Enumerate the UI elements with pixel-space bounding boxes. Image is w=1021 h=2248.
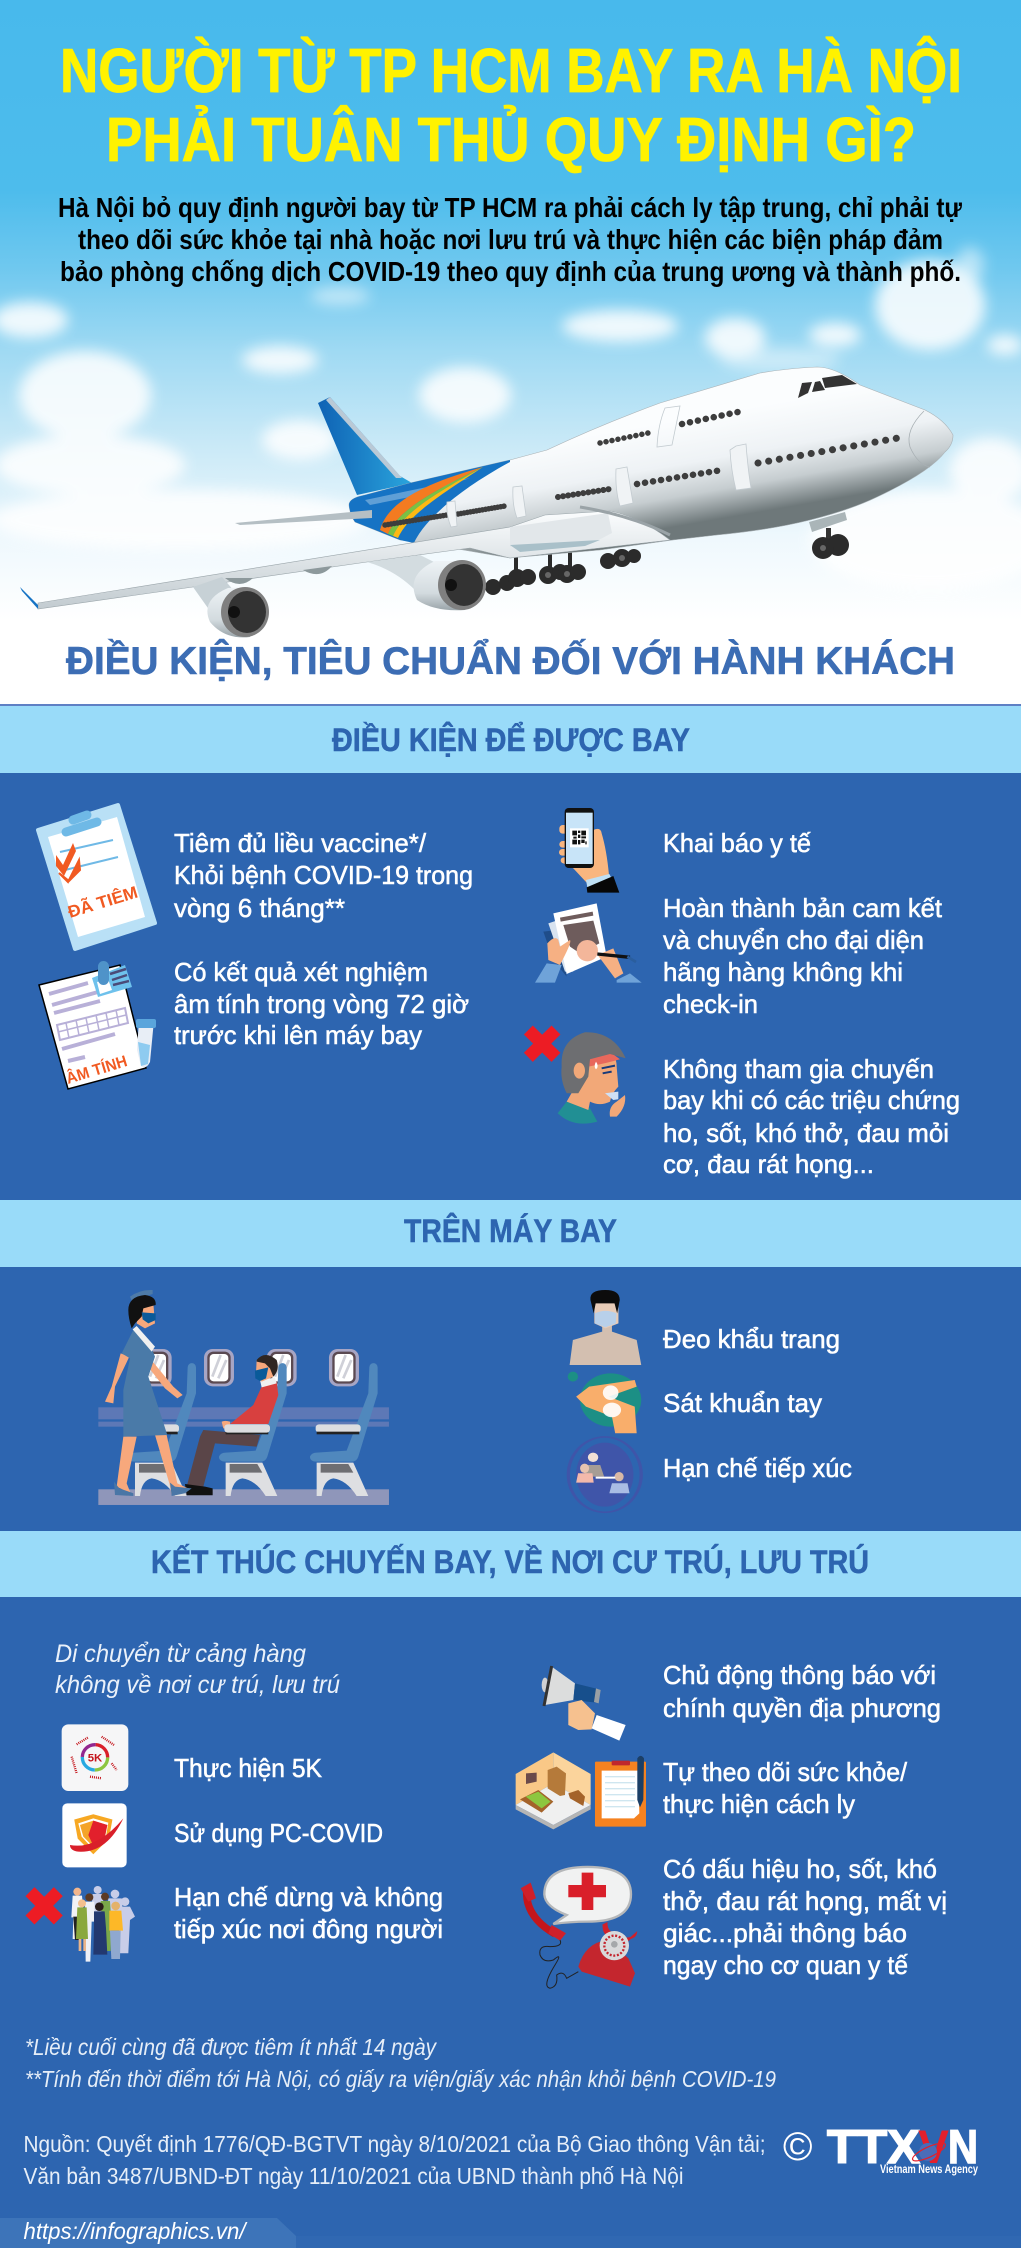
logo: TTXVN: TTX: [827, 2120, 920, 2173]
text: self monitoring: [663, 1757, 908, 1819]
icon: crowd with red cross: [30, 1886, 135, 1962]
text: hand sanitizing: Sát khuẩn tay: [663, 1388, 822, 1418]
source: Văn bản 3487/UBND-ĐT ngày 11/10/2021 của UBND thành phố Hà Nội: [24, 2163, 684, 2189]
flight attendant: [117, 1435, 190, 1495]
panel: on the plane: [0, 1200, 1021, 1531]
text: avoid crowds: [174, 1882, 443, 1944]
copyright mark: ©: [783, 2125, 812, 2169]
icon: coughing person with red cross: [528, 1030, 626, 1124]
website tab: [0, 2218, 1021, 2248]
text: travel from airport: Di chuyển từ cảng hàng: [55, 1640, 306, 1668]
icon: negative test sheet: [39, 961, 156, 1089]
fuselage: [349, 367, 953, 558]
text: notify local government: chính quyền địa phương: [663, 1693, 941, 1723]
logo: TTXVN: N: [948, 2120, 978, 2173]
text: symptoms: Không tham gia chuyến: [663, 1054, 934, 1084]
clouds: [0, 247, 1021, 590]
section heading: after the flight: KẾT THÚC CHUYẾN BAY, VỀ NƠI CƯ TRÚ, LƯU TRÚ: [151, 1544, 869, 1580]
footnotes: *Liều cuối cùng đã được tiêm ít nhất 14 ngày: [25, 2034, 437, 2060]
text: report symptoms: [663, 1854, 947, 1980]
text: symptoms: cơ, đau rát họng...: [663, 1149, 874, 1179]
airplane illustration: [20, 367, 953, 637]
icon: 5K badge: 5K: [88, 1753, 103, 1765]
logo: TTXVN: [827, 2120, 978, 2176]
footnotes: [25, 2034, 776, 2092]
panel: sky header: [0, 0, 1021, 705]
rainbow stripes: [380, 467, 483, 534]
tail fin: [318, 397, 412, 495]
text: commitment: check-in: [663, 989, 758, 1019]
heading: passenger conditions: ĐIỀU KIỆN, TIÊU CHUẨN ĐỐI VỚI HÀNH KHÁCH: [66, 638, 955, 683]
text: notify local government: Chủ động thông báo với: [663, 1660, 936, 1690]
stabilizer: [235, 510, 372, 525]
right engine: [414, 561, 485, 610]
logo: TTXVN: V: [918, 2120, 950, 2173]
panel: after the flight: [0, 1531, 1021, 2248]
text: negative test: trước khi lên máy bay: [174, 1020, 422, 1050]
text: vaccine: Khỏi bệnh COVID-19 trong: [174, 860, 473, 890]
icon: quarantine room and clipboard: [516, 1752, 646, 1829]
footnotes: **Tính đến thời điểm tới Hà Nội, có giấy ra viện/giấy xác nhận khỏi bệnh COVID-19: [25, 2066, 776, 2092]
text: symptoms: bay khi có các triệu chứng: [663, 1085, 960, 1115]
icon: negative test sheet: ÂM TÍNH: [64, 1051, 129, 1088]
source: Nguồn: Quyết định 1776/QĐ-BGTVT ngày 8/10/2021 của Bộ Giao thông Vận tải;: [24, 2131, 766, 2157]
text: wear mask: Đeo khẩu trang: [663, 1324, 840, 1354]
source: [24, 2131, 766, 2189]
text: report symptoms: Có dấu hiệu ho, sốt, khó: [663, 1854, 937, 1884]
text: avoid crowds: tiếp xúc nơi đông người: [174, 1914, 443, 1944]
text: 5K: Thực hiện 5K: [174, 1753, 323, 1783]
icon: person wearing mask: [570, 1290, 641, 1365]
text: medical declaration: Khai báo y tế: [663, 828, 812, 858]
engine pylons: [193, 577, 235, 618]
text: report symptoms: ngay cho cơ quan y tế: [663, 1950, 909, 1980]
near wing: [38, 511, 670, 609]
text: travel from airport: [55, 1640, 340, 1699]
text: self monitoring: thực hiện cách ly: [663, 1789, 855, 1819]
intro text: [58, 192, 963, 287]
icon: red telephone with medical bubble: [521, 1867, 636, 1988]
doors: [447, 406, 751, 527]
icon: 5K badge: [62, 1724, 128, 1791]
icon: phone with QR code: [559, 808, 619, 893]
text: report symptoms: giác...phải thông báo: [663, 1918, 907, 1948]
icon: limit contact: [568, 1437, 641, 1512]
website tab: https://infographics.vn/: [24, 2218, 248, 2244]
text: notify local government: [663, 1660, 941, 1723]
text: travel from airport: không về nơi cư trú, lưu trú: [55, 1671, 340, 1699]
text: self monitoring: Tự theo dõi sức khỏe/: [663, 1757, 908, 1787]
text: commitment: hãng hàng không khi: [663, 957, 903, 987]
text: negative test: [174, 957, 469, 1050]
text: commitment: và chuyển cho đại diện: [663, 925, 924, 955]
text: negative test: Có kết quả xét nghiệm: [174, 957, 428, 987]
text: vaccine: Tiêm đủ liều vaccine*/: [174, 828, 427, 858]
title: PHẢI TUÂN THỦ QUY ĐỊNH GÌ?: [106, 106, 916, 175]
left engine: [207, 587, 268, 637]
text: vaccine: vòng 6 tháng**: [174, 893, 345, 923]
text: commitment: Hoàn thành bản cam kết: [663, 893, 943, 923]
icon: megaphone: [542, 1666, 626, 1741]
text: symptoms: [663, 1054, 960, 1179]
panel: flight conditions: [0, 704, 1021, 1200]
icon: PC-COVID badge: [62, 1803, 127, 1867]
section heading: flight conditions: ĐIỀU KIỆN ĐỂ ĐƯỢC BAY: [332, 722, 690, 758]
nose cone line: [909, 411, 930, 467]
cockpit windows: [798, 382, 812, 398]
text: limit contact: Hạn chế tiếp xúc: [663, 1453, 852, 1483]
passenger windows: [385, 412, 898, 525]
section heading: on the plane: TRÊN MÁY BAY: [404, 1213, 617, 1249]
text: avoid crowds: Hạn chế dừng và không: [174, 1882, 443, 1912]
icon: signing commitment: [535, 903, 642, 983]
icon: vaccinated clipboard: ĐÃ TIÊM: [65, 882, 140, 922]
text: PC-COVID: Sử dụng PC-COVID: [174, 1818, 383, 1848]
landing gear: [485, 528, 849, 595]
seated passenger: [230, 1382, 278, 1424]
text: commitment: [663, 893, 943, 1019]
text: report symptoms: thở, đau rát họng, mất vị: [663, 1886, 947, 1916]
icon: washing hands: [568, 1372, 641, 1433]
tail livery: [349, 460, 510, 543]
logo: TTXVN: Vietnam News Agency: [880, 2164, 978, 2176]
seats: [128, 1363, 196, 1496]
text: negative test: âm tính trong vòng 72 giờ: [174, 989, 469, 1019]
illustration: cabin scene: [98, 1290, 389, 1505]
text: symptoms: ho, sốt, khó thở, đau mỏi: [663, 1118, 949, 1148]
text: vaccine: [174, 828, 473, 923]
icon: vaccinated clipboard: [38, 805, 155, 949]
title: [60, 37, 962, 175]
